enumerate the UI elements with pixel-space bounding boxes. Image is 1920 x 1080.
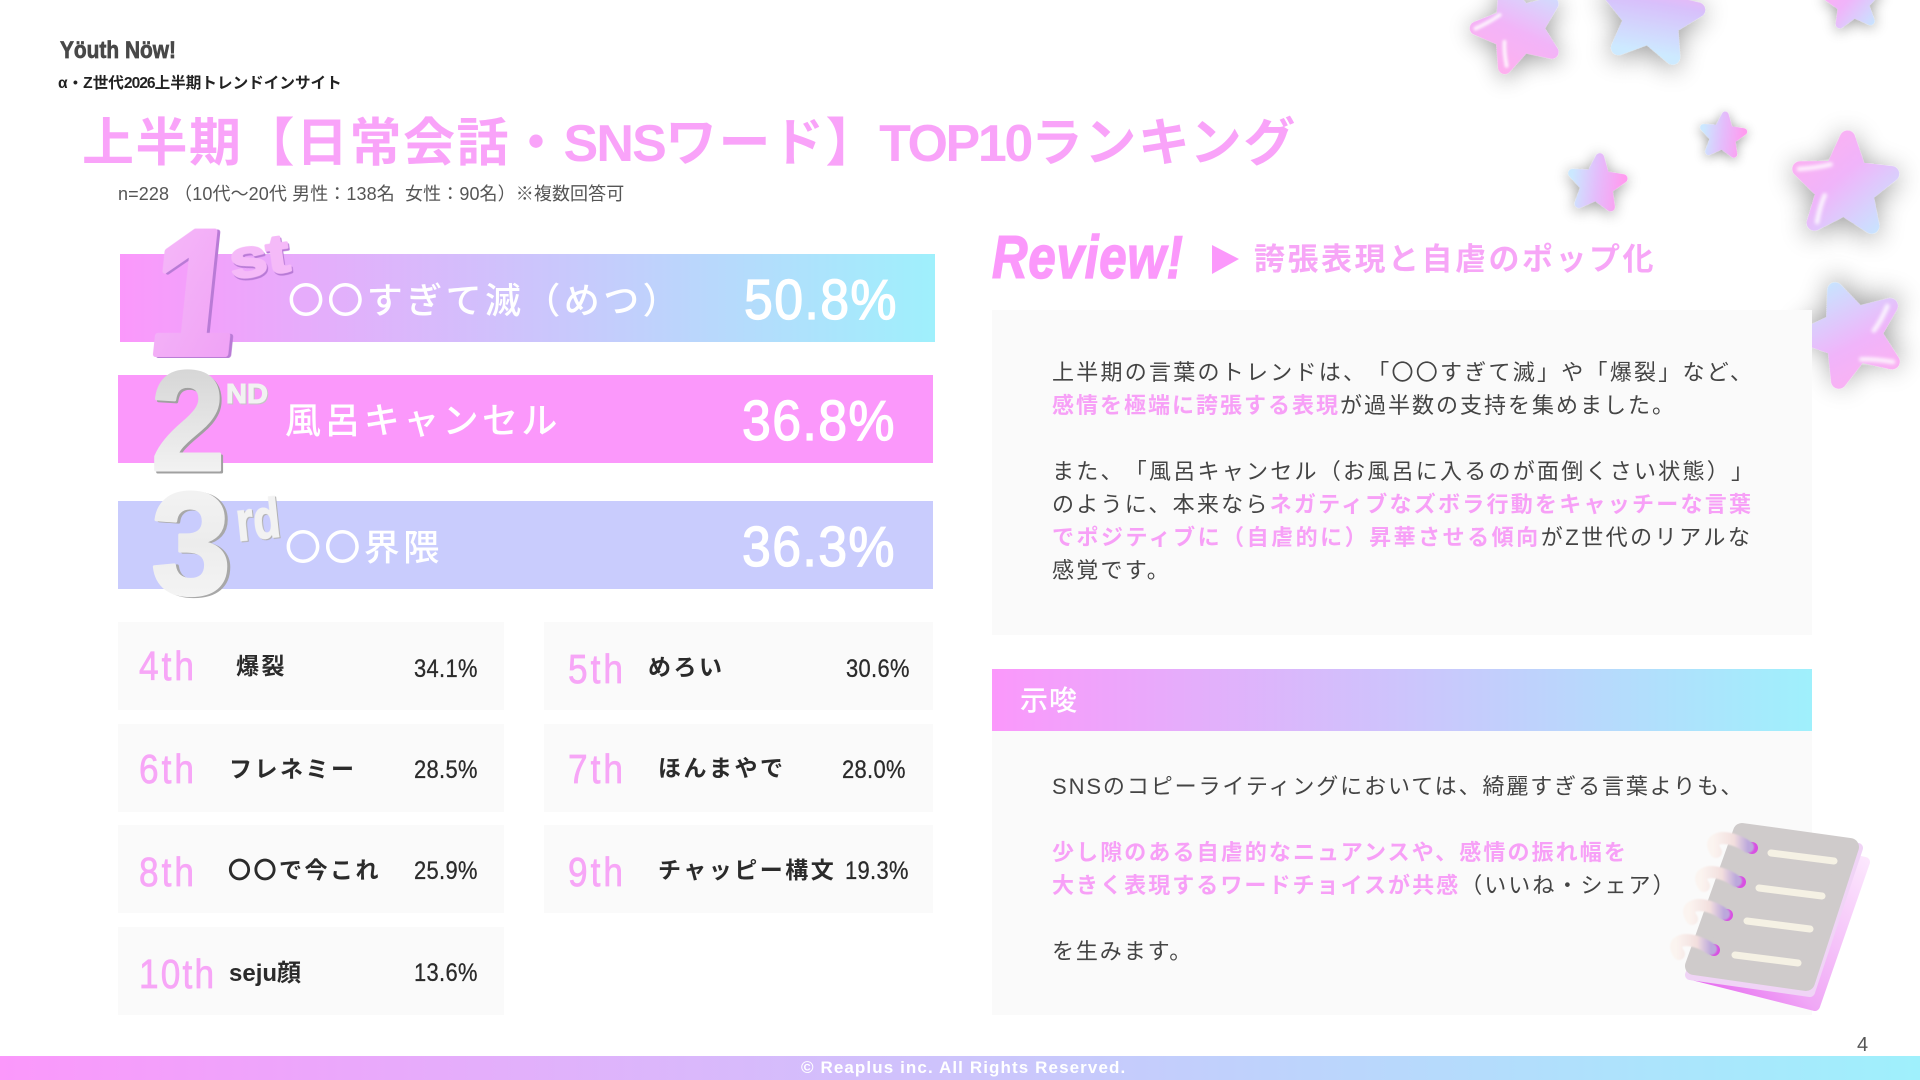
5th rank: 5th [568, 646, 626, 692]
5th value: 30.6% [846, 655, 910, 683]
icon: star 4 [1701, 113, 1745, 155]
implications text: 少し隙のある自虐的なニュアンスや、感情の振れ幅を [1052, 840, 1628, 865]
10th word: seju顔 [229, 960, 301, 987]
4th rank: 4th [139, 643, 197, 689]
review text [1052, 360, 1755, 583]
implications title: 示唆 [1020, 685, 1078, 716]
8th value: 25.9% [414, 857, 478, 885]
10th rank: 10th [139, 951, 216, 997]
panel: review [992, 310, 1812, 635]
implications text: を生みます。 [1052, 939, 1193, 964]
bar: rank 1 [120, 254, 935, 342]
4th word: 爆裂 [236, 653, 287, 679]
icon: star 3 [1826, 0, 1880, 25]
4th value: 34.1% [414, 655, 478, 683]
card: 5th [544, 622, 933, 710]
numeral 2nd: ND [226, 378, 268, 409]
sample note: n=228 （10代～20代 男性：138名 女性：90名）※複数回答可 [118, 184, 624, 204]
page number: 4 [1857, 1034, 1868, 1056]
bar: rank 2 [118, 375, 933, 463]
card: 4th [118, 622, 504, 710]
numeral 1st: 1 [142, 192, 247, 392]
review text: のように、本来ならネガティブなズボラ行動をキャッチーな言葉 [1052, 492, 1753, 517]
brand logo: Yöuth Nöw! [60, 37, 176, 64]
6th rank: 6th [139, 746, 197, 792]
6th value: 28.5% [414, 756, 478, 784]
icon: star 7 [1795, 285, 1908, 394]
7th value: 28.0% [842, 756, 906, 784]
review subtitle: 誇張表現と自虐のポップ化 [1254, 242, 1656, 277]
rank 2 label: 風呂キャンセル [285, 400, 561, 441]
rank 3 label: 〇〇界隈 [285, 527, 443, 568]
card: 7th [544, 724, 933, 812]
footer bar [0, 1056, 1920, 1080]
numeral 2nd: 2 [151, 342, 225, 501]
review text: でポジティブに（自虐的に）昇華させる傾向がZ世代のリアルな [1052, 525, 1752, 550]
numeral 3rd: rd [233, 486, 283, 553]
implications text: 大きく表現するワードチョイスが共感（いいね・シェア） [1052, 873, 1677, 898]
title: 上半期【日常会話・SNSワード】TOP10ランキング [82, 115, 1297, 173]
9th value: 19.3% [845, 857, 909, 885]
review text: 感覚です。 [1052, 558, 1171, 583]
Review heading: Review! [992, 224, 1184, 291]
rank 1 label: 〇〇すぎて滅（めつ） [288, 280, 682, 321]
panel: implications [992, 731, 1812, 1015]
9th rank: 9th [568, 849, 626, 895]
card: 6th [118, 724, 504, 812]
icon: star 6 [1796, 136, 1893, 227]
card: 9th [544, 825, 933, 913]
rank 1 value: 50.8% [744, 268, 898, 332]
rank 3 value: 36.3% [742, 515, 896, 579]
5th word: めろい [648, 654, 724, 680]
review text: また、「風呂キャンセル（お風呂に入るのが面倒くさい状態）」 [1052, 459, 1755, 484]
8th rank: 8th [139, 849, 197, 895]
implications header [992, 669, 1812, 731]
numeral 3rd [151, 462, 283, 625]
implications text [1052, 774, 1744, 964]
10th value: 13.6% [414, 959, 478, 987]
bar: rank 3 [118, 501, 933, 589]
icon: notebook [1671, 823, 1870, 1011]
arrow [1212, 245, 1239, 274]
9th word: チャッピー構文 [658, 857, 836, 883]
review text: 感情を極端に誇張する表現が過半数の支持を集めました。 [1052, 393, 1676, 418]
icon: star 5 [1569, 155, 1625, 208]
7th rank: 7th [568, 746, 626, 792]
review text: 上半期の言葉のトレンドは、「〇〇すぎて滅」や「爆裂」など、 [1052, 360, 1754, 385]
rank 2 value: 36.8% [742, 389, 896, 453]
6th word: フレネミー [229, 756, 356, 782]
numeral 2nd [151, 342, 268, 501]
card: 10th [118, 927, 504, 1015]
copyright: © Reaplus inc. All Rights Reserved. [801, 1058, 1126, 1077]
icon: star 2 [1602, 0, 1703, 60]
implications text: SNSのコピーライティングにおいては、綺麗すぎる言葉よりも、 [1052, 774, 1744, 799]
numeral 3rd: 3 [151, 462, 231, 625]
7th word: ほんまやで [658, 755, 786, 781]
8th word: 〇〇で今これ [228, 857, 381, 883]
card: 8th [118, 825, 504, 913]
numeral 1st: st [225, 223, 293, 291]
report subtitle: α・Z世代2026上半期トレンドインサイト [58, 75, 342, 92]
icon: star 1 [1467, 0, 1566, 72]
